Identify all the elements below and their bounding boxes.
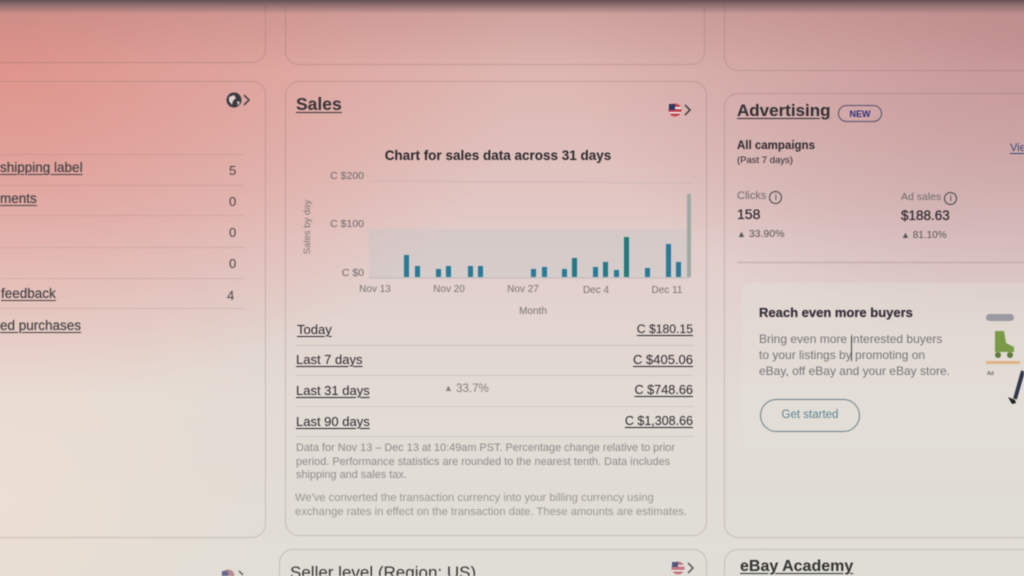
row: last 7 days: C $405.06 xyxy=(633,352,693,367)
all campaigns xyxy=(736,139,816,166)
metric: ad sales xyxy=(900,191,958,241)
x axis labels: Month xyxy=(519,306,547,317)
heading: advertising: Advertising xyxy=(737,101,831,120)
panel: advertising xyxy=(724,93,1024,538)
icon: flag left panel xyxy=(221,569,244,576)
ad sales label xyxy=(900,191,958,206)
count 0 row three: 0 xyxy=(229,225,236,240)
illustration: roller skate ad xyxy=(986,314,1024,405)
icon: globe with chevron xyxy=(226,92,250,108)
row: last 90 days: Last 90 days xyxy=(296,414,370,429)
badge: new xyxy=(838,105,882,122)
x axis labels: Dec 11 xyxy=(652,285,683,296)
row: last 31 days xyxy=(295,383,694,399)
panel: ebay academy xyxy=(724,549,1024,576)
clicks label: Clicks xyxy=(737,190,766,202)
count 0 row four: 0 xyxy=(229,256,236,271)
panel: seller level xyxy=(279,549,707,576)
metric: clicks xyxy=(737,190,785,240)
promo heading: Reach even more buyers xyxy=(759,305,913,320)
clicks label: i xyxy=(775,192,777,202)
icon: flag with chevron xyxy=(670,561,694,575)
icon: text cursor xyxy=(851,336,852,361)
list row: payments: ments xyxy=(0,191,37,206)
top row card bottoms xyxy=(0,9,1024,71)
badge: new: NEW xyxy=(850,109,870,119)
row: today: Today xyxy=(297,322,332,337)
row: last 7 days: Last 7 days xyxy=(296,352,362,367)
y axis labels xyxy=(330,170,364,279)
footnote: currency: We've converted the transaction currency into your billing currency using xyxy=(295,492,654,504)
row: today: C $180.15 xyxy=(637,322,693,336)
ad sales change: ▲ 81.10% xyxy=(901,230,947,241)
all campaigns: All campaigns xyxy=(737,140,815,152)
footnote: currency xyxy=(294,492,687,518)
bars xyxy=(404,237,681,277)
row: last 31 days: Last 31 days xyxy=(296,383,370,398)
row: last 90 days: C $1,308.66 xyxy=(625,414,693,428)
promo text: Bring even more interested buyers xyxy=(759,332,942,346)
count 5: 5 xyxy=(229,163,236,178)
chart title: Chart for sales data across 31 days xyxy=(385,148,611,163)
y axis labels: C $200 xyxy=(330,170,364,182)
promo text: eBay, off eBay and your eBay store. xyxy=(759,364,950,378)
x axis labels xyxy=(359,284,683,317)
y axis labels: C $100 xyxy=(330,218,364,230)
chart: sales per day xyxy=(302,148,692,317)
icon: US flag with chevron xyxy=(668,102,692,118)
footnote: currency: exchange rates in effect on the transaction date. These amounts are estimates. xyxy=(295,506,687,518)
ad sales value: $188.63 xyxy=(901,208,950,223)
ad sales label: Ad sales xyxy=(901,191,941,203)
heading: sales: Sales xyxy=(296,94,342,114)
row: today xyxy=(296,322,694,338)
list row: purchases: ed purchases xyxy=(0,318,81,333)
plot band xyxy=(369,229,690,278)
clicks label xyxy=(737,190,783,205)
x axis labels: Dec 4 xyxy=(583,285,609,296)
y axis labels: C $0 xyxy=(342,267,364,279)
count 0: 0 xyxy=(229,194,236,209)
heading: ebay academy: eBay Academy xyxy=(740,558,853,575)
footnote: data range: period. Performance statistics are rounded to the nearest tenth. Data includes xyxy=(296,456,670,468)
footnote: data range xyxy=(296,442,676,481)
row: last 7 days xyxy=(295,352,694,368)
all campaigns: (Past 7 days) xyxy=(737,155,793,166)
list row: feedback: feedback xyxy=(1,286,56,301)
y axis title: Sales by day xyxy=(302,200,313,254)
footnote: data range: Data for Nov 13 – Dec 13 at 10:49am PST. Percentage change relative to prior xyxy=(296,442,675,454)
x axis labels: Nov 20 xyxy=(433,284,465,295)
illustration: roller skate ad: Ad xyxy=(987,371,994,377)
today bar xyxy=(687,194,691,277)
promo: reach even more buyers xyxy=(741,283,1024,453)
ad sales label: i xyxy=(950,193,952,203)
clicks value: 158 xyxy=(737,206,760,222)
button: get started xyxy=(760,399,860,432)
x axis labels: Nov 27 xyxy=(507,284,539,295)
promo text xyxy=(758,332,950,378)
list row: shipping label: shipping label xyxy=(0,160,83,175)
promo text: to your listings by promoting on xyxy=(759,348,925,362)
panel: tasks left xyxy=(0,81,266,538)
row: last 31 days: ▲ 33.7% xyxy=(444,383,489,395)
button: get started: Get started xyxy=(782,409,838,421)
row: last 90 days xyxy=(295,414,694,430)
panel: sales xyxy=(285,81,707,536)
count 4: 4 xyxy=(227,288,234,303)
clicks change: ▲ 33.90% xyxy=(737,228,784,240)
footnote: data range: shipping and sales tax. xyxy=(296,469,407,481)
row: last 31 days: C $748.66 xyxy=(634,383,693,397)
x axis labels: Nov 13 xyxy=(359,284,391,295)
